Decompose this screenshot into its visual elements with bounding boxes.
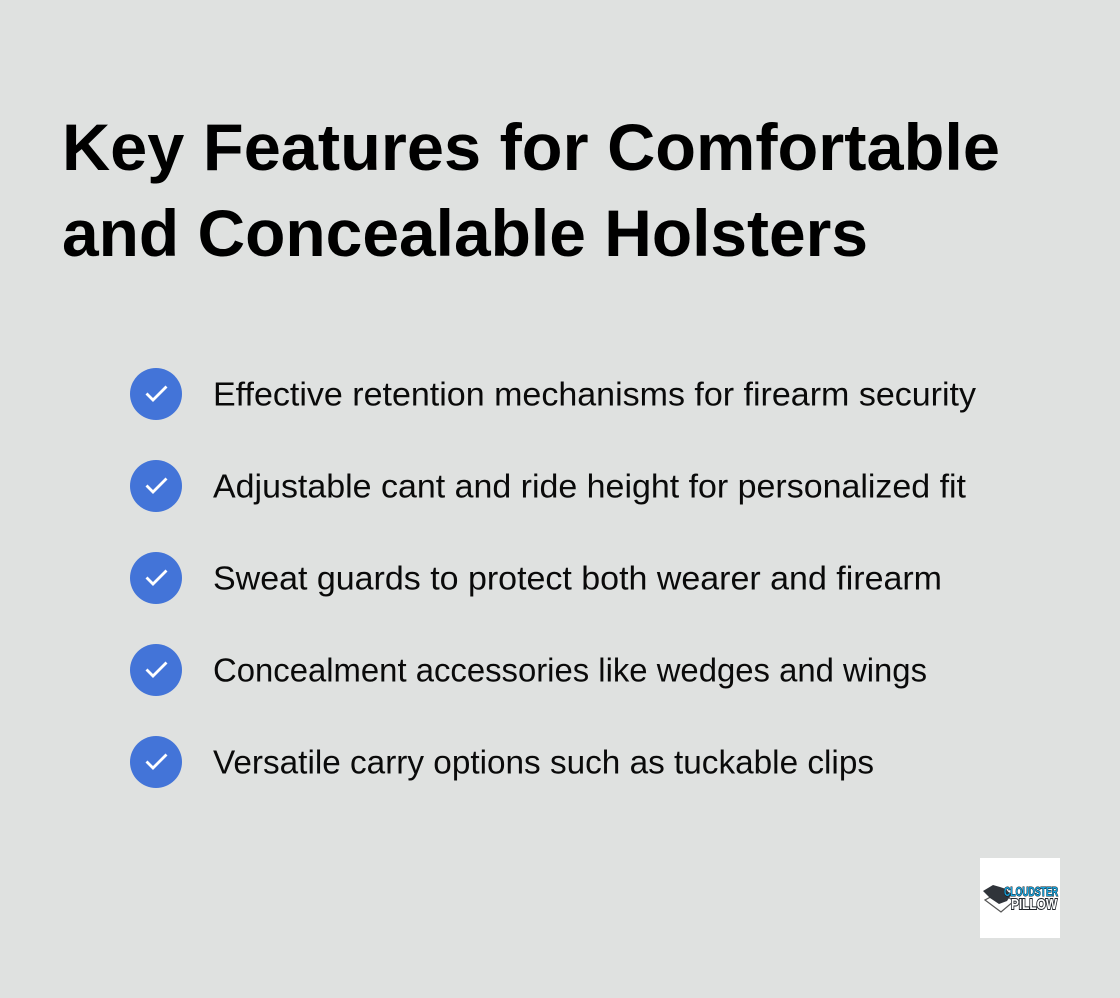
item: adjustable cant: Adjustable cant and ride height for personalized fit (213, 468, 966, 504)
logo: Cloudster Pillow (980, 858, 1060, 938)
item: retention mechanisms (130, 368, 977, 420)
title (62, 110, 1000, 270)
title: and Concealable Holsters (62, 196, 868, 270)
item: sweat guards (130, 552, 942, 604)
item: versatile carry (130, 736, 874, 788)
logo: Cloudster Pillow: CLOUDSTER (1004, 884, 1058, 899)
item: versatile carry: Versatile carry options such as tuckable clips (213, 744, 874, 780)
title: Key Features for Comfortable (62, 110, 1000, 184)
item: concealment accessories (130, 644, 927, 696)
item: retention mechanisms: Effective retention mechanisms for firearm security (213, 376, 977, 412)
feature list (130, 368, 977, 788)
logo: Cloudster Pillow: PILLOW (1011, 896, 1058, 913)
item: concealment accessories: Concealment accessories like wedges and wings (213, 652, 927, 688)
item: sweat guards: Sweat guards to protect both wearer and firearm (213, 560, 942, 596)
item: adjustable cant (130, 460, 966, 512)
